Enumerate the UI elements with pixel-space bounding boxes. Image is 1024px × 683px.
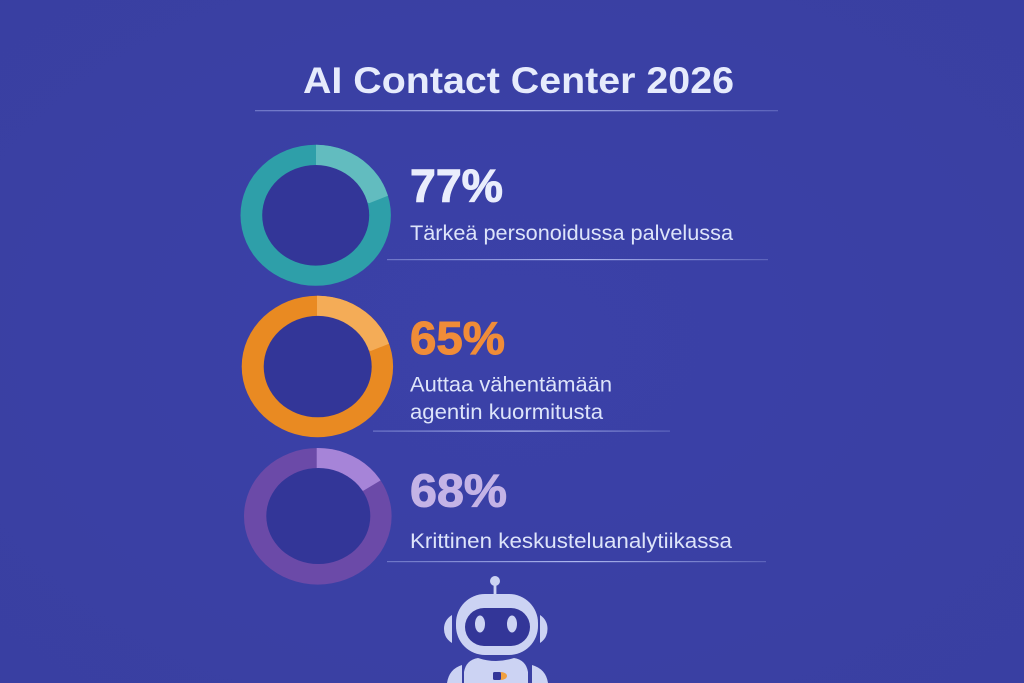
- donut chart: 68% purple: [244, 448, 392, 585]
- stat label: personalised service: Tärkeä personoidussa palvelussa: [410, 221, 733, 245]
- stat number: 77%: 77%: [410, 160, 503, 212]
- stat label: conversation analytics: Krittinen keskusteluanalytiikassa: [410, 529, 732, 553]
- donut chart: 77% teal: [240, 144, 391, 286]
- panel: 68% stat: [244, 438, 766, 585]
- donut chart: 65% orange: [242, 296, 394, 438]
- stat label: reduces agent workload: [410, 372, 612, 424]
- panel: 65% stat: [242, 285, 670, 437]
- stat number: 65%: 65%: [410, 312, 505, 364]
- title: AI Contact Center 2026: [303, 60, 734, 101]
- panel: 77% stat: [241, 135, 768, 286]
- stat label: reduces agent workload: agentin kuormitusta: [410, 400, 603, 424]
- infographic canvas: [240, 67, 778, 683]
- stat number: 68%: 68%: [410, 464, 507, 516]
- stat label: reduces agent workload: Auttaa vähentämään: [410, 372, 612, 396]
- icon: robot: [444, 576, 548, 683]
